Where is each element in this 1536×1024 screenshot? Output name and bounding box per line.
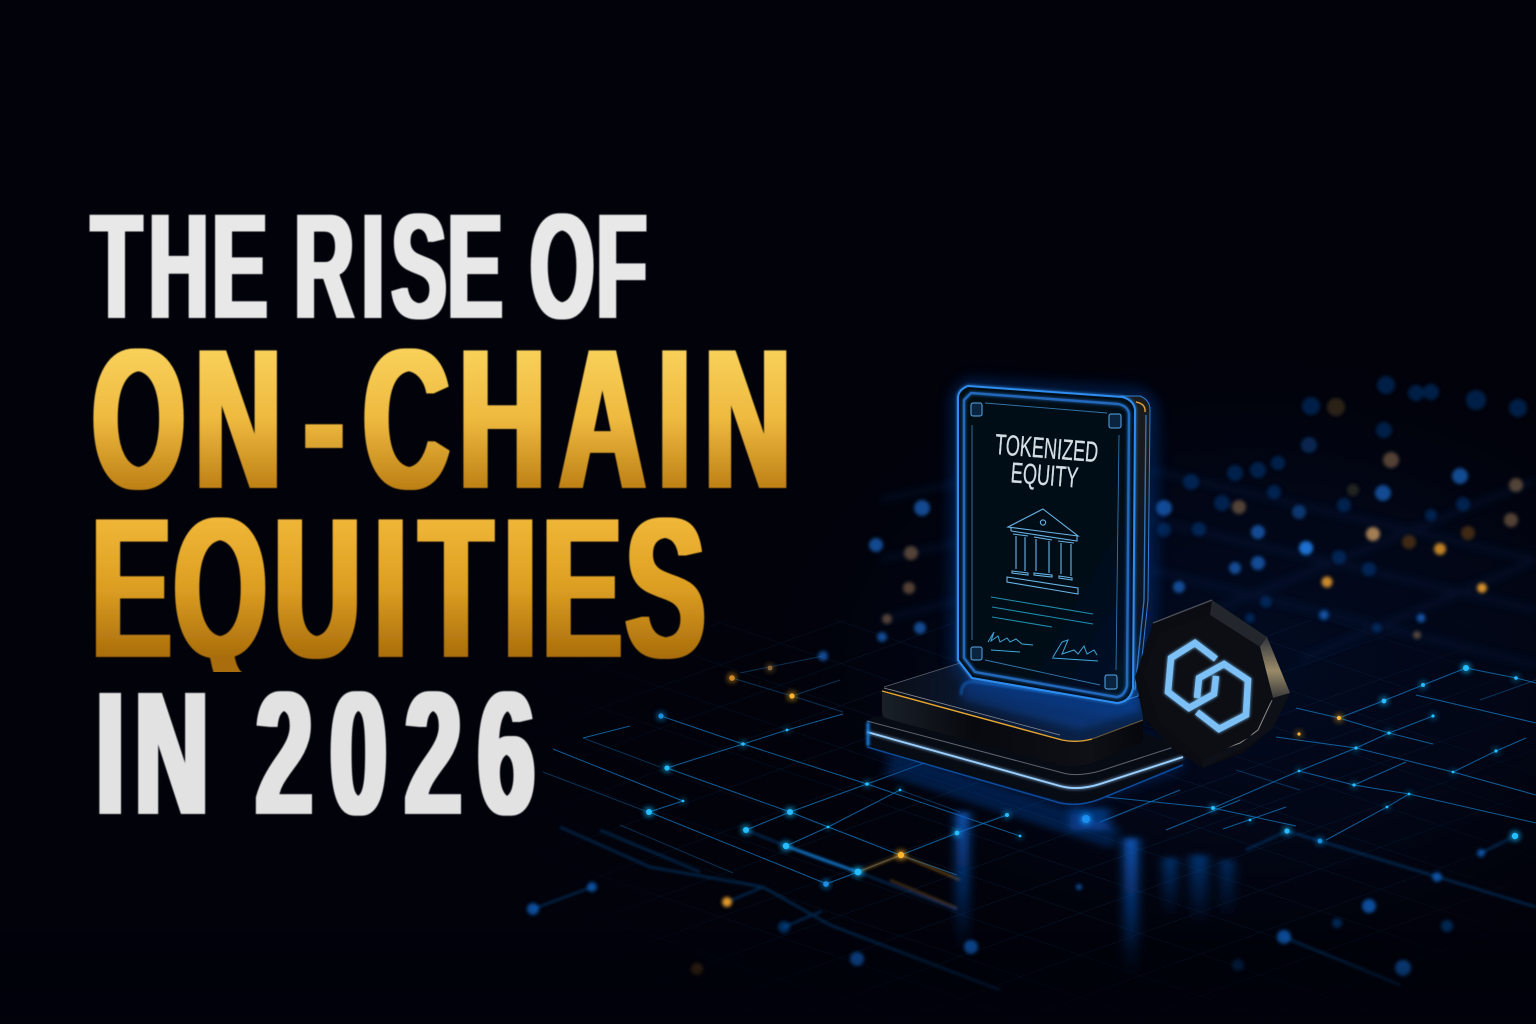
floor grid: soft wide lines — [533, 827, 1536, 990]
bright grid nodes — [646, 665, 1518, 887]
corner seals — [971, 403, 1121, 689]
card glow — [958, 386, 1150, 703]
bokeh lights — [527, 376, 1527, 976]
reflection of the plinth on the floor — [885, 754, 1234, 978]
card inner border — [964, 393, 1129, 697]
gold grid nodes — [729, 666, 1341, 858]
coin edge — [1210, 600, 1290, 698]
signatures — [988, 632, 1098, 661]
lower slab — [867, 690, 1183, 804]
card side — [1117, 396, 1150, 703]
icon: interlocked hexagon links — [1168, 643, 1248, 729]
title line: the rise of: THE RISE OF — [91, 182, 647, 350]
coin face — [1143, 615, 1273, 760]
plinth glow — [867, 720, 1185, 805]
upper slab — [882, 663, 1143, 766]
card text: tokenized equity: EQUITY — [1010, 457, 1079, 495]
tokenized equity plinth — [867, 663, 1185, 805]
floor grid: faint texture — [450, 620, 1536, 1024]
chain link coin — [1135, 600, 1290, 768]
certificate text lines — [991, 597, 1093, 627]
title — [91, 182, 791, 852]
card text: tokenized equity — [992, 429, 1099, 496]
bottom fade — [0, 930, 1536, 1024]
icon: bank building — [1007, 509, 1078, 594]
title line: equities: EQUITIES — [91, 477, 705, 700]
coin body — [1135, 600, 1290, 768]
card text: tokenized equity: TOKENIZED — [994, 429, 1099, 469]
coin highlight — [1260, 637, 1290, 698]
title line: on-chain: ON-CHAIN — [92, 308, 791, 531]
card front — [958, 386, 1135, 703]
glass certificate card — [958, 386, 1150, 703]
card inner lines — [972, 403, 1119, 685]
out-of-focus grid bands in the upper right — [880, 440, 1536, 665]
coin rim — [1153, 600, 1212, 623]
title line: in 2026: IN 2026 — [96, 656, 535, 852]
floor grid: main lines — [543, 656, 1536, 884]
